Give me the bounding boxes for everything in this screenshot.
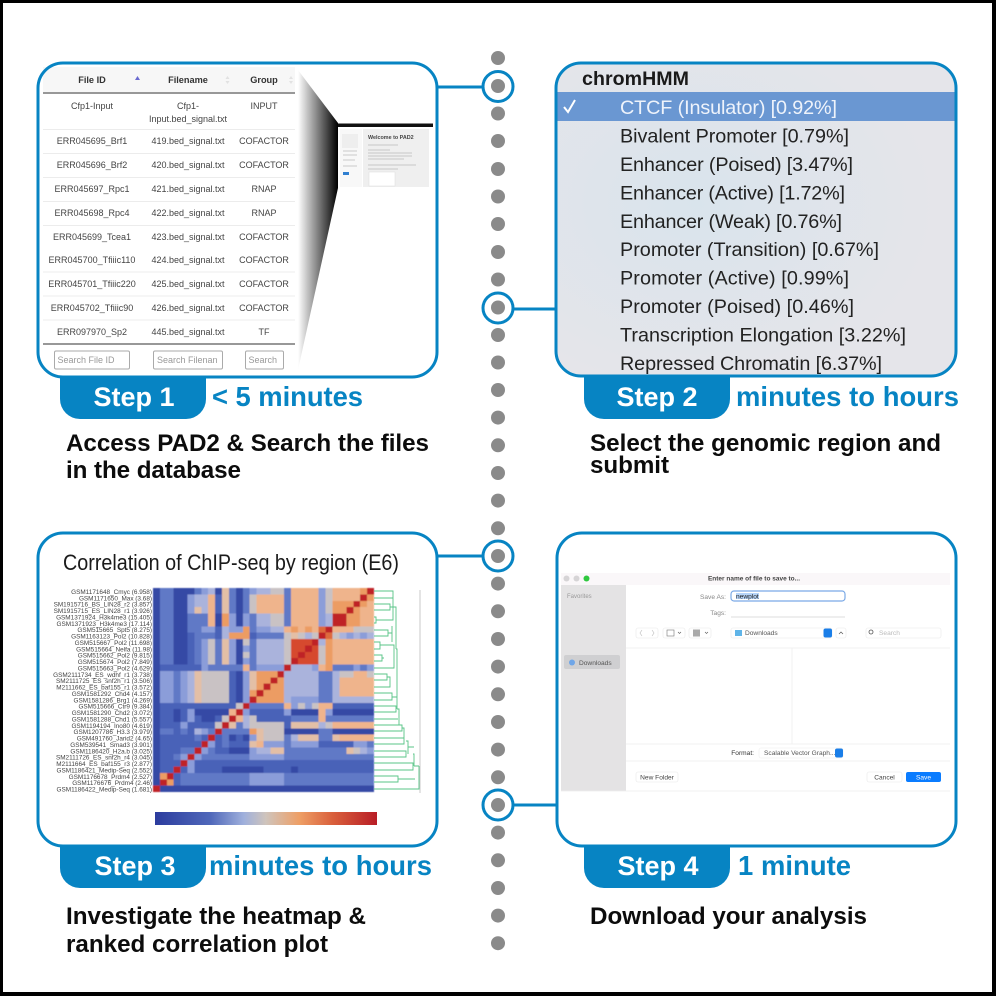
step 2 description: submit xyxy=(590,452,669,479)
step 2 tab: Step 2 xyxy=(616,382,698,412)
table of files: ERR045696_Brf2 xyxy=(57,160,127,170)
menu items: Transcription Elongation [3.22%] xyxy=(620,325,906,347)
step 2 tab xyxy=(584,376,730,419)
row labels: GSM1581286_Brg1 (4.269) xyxy=(73,697,152,704)
row labels: GSM1176678_Prdm4 (2.527) xyxy=(69,774,152,781)
menu items: Enhancer (Weak) [0.76%] xyxy=(620,211,842,233)
step 1 tab xyxy=(60,376,206,419)
table of files: Cfp1- xyxy=(177,101,199,111)
row labels: GSM1171648_Cmyc (6.958) xyxy=(71,589,152,596)
step 2 time: minutes to hours xyxy=(736,381,959,412)
row labels: SM1915716_BS_LIN28_r2 (3.857) xyxy=(54,602,152,609)
step 1 description: Access PAD2 & Search the files xyxy=(66,430,429,457)
step 4 tab: Step 4 xyxy=(617,851,699,881)
table of files: 424.bed_signal.txt xyxy=(151,255,225,265)
heatmap title: Correlation of ChIP-seq by region (E6) xyxy=(63,550,399,575)
row labels: GSM491760_Jarid2 (4.65) xyxy=(77,736,152,743)
row labels: GSM1371924_H3k4me3 (15.405) xyxy=(56,614,152,622)
table of files: ERR045698_Rpc4 xyxy=(54,208,130,218)
dialog buttons: Cancel xyxy=(874,774,895,781)
connector: step 3 to timeline xyxy=(438,541,513,571)
format selector: Scalable Vector Graph... xyxy=(764,750,836,757)
row labels: GSM1581292_Chd4 (4.157) xyxy=(72,691,152,698)
menu items: Promoter (Transition) [0.67%] xyxy=(620,239,879,261)
format selector xyxy=(731,748,843,758)
row labels: M2111664_ES_baf155_r3 (2.877) xyxy=(56,761,152,768)
table of files: 419.bed_signal.txt xyxy=(151,136,225,146)
table of files: INPUT xyxy=(250,101,278,111)
file browser dividers xyxy=(561,648,950,791)
table of files: 425.bed_signal.txt xyxy=(151,279,225,289)
menu items: Enhancer (Poised) [3.47%] xyxy=(620,154,853,176)
row labels: GSM515662_Pol2 (9.815) xyxy=(78,653,152,660)
table of files: 423.bed_signal.txt xyxy=(151,232,225,242)
dialog sidebar: Favorites xyxy=(567,594,592,600)
thumbnail: PAD2 welcome page xyxy=(338,124,433,187)
table of files: COFACTOR xyxy=(239,255,289,265)
save-as fields: newplot xyxy=(736,594,759,600)
menu items: Promoter (Active) [0.99%] xyxy=(620,268,849,290)
table of files: COFACTOR xyxy=(239,303,289,313)
dialog buttons xyxy=(636,772,941,782)
row labels: GSM2111734_ES_wdhf_r1 (3.738) xyxy=(53,672,152,679)
table of files: COFACTOR xyxy=(239,160,289,170)
save-as fields: Tags: xyxy=(710,610,726,617)
step 2 description: Select the genomic region and xyxy=(590,430,941,457)
table of files: ERR045699_Tcea1 xyxy=(53,232,131,242)
table of files: COFACTOR xyxy=(239,232,289,242)
step 4 tab xyxy=(584,846,730,888)
row labels: GSM1186422_Medip-Seq (1.681) xyxy=(57,787,152,794)
table of files: 421.bed_signal.txt xyxy=(151,184,225,194)
panel: step 2 chromHMM menu xyxy=(556,63,956,376)
zoom funnel from thumbnail xyxy=(298,70,338,370)
correlation heatmap grid xyxy=(153,588,374,792)
panel 1 border xyxy=(38,63,437,377)
step 3 description: Investigate the heatmap & xyxy=(66,903,366,930)
step 4 time: 1 minute xyxy=(738,850,851,881)
table of files: COFACTOR xyxy=(239,136,289,146)
row labels: GSM1581288_Chd1 (5.557) xyxy=(72,716,152,724)
dialog title bar: Enter name of file to save to... xyxy=(708,576,800,582)
table of files: ERR045702_Tfiiic90 xyxy=(51,303,133,313)
step 3 description: ranked correlation plot xyxy=(66,931,328,958)
row labels: GSM1207786_H3.3 (3.979) xyxy=(73,729,152,736)
table of files: 420.bed_signal.txt xyxy=(151,160,225,170)
panel 2 border xyxy=(556,63,956,376)
search inputs: Search File ID xyxy=(58,355,115,365)
search inputs: Search Filenan xyxy=(157,355,218,365)
dialog toolbar: Search xyxy=(879,630,900,637)
connector: step 1 to timeline xyxy=(438,72,513,102)
colour scale bar xyxy=(155,812,377,825)
save-as fields: Save As: xyxy=(700,594,726,601)
dialog toolbar xyxy=(636,628,941,638)
menu items: Bivalent Promoter [0.79%] xyxy=(620,126,849,148)
table of files: Input.bed_signal.txt xyxy=(149,114,228,124)
thumbnail: PAD2 welcome page: Welcome to PAD2 xyxy=(368,135,414,141)
table of files: Cfp1-Input xyxy=(71,101,114,111)
row labels: GSM1186420_H2a.b (3.025) xyxy=(70,748,152,755)
table of files: ERR045701_Tfiiic220 xyxy=(48,279,136,289)
connector: step 4 to timeline xyxy=(483,790,556,820)
dialog buttons: Save xyxy=(916,774,931,781)
selected row highlight xyxy=(556,92,956,121)
table header band xyxy=(43,67,295,92)
table of files: ERR045700_Tfiiic110 xyxy=(49,255,135,265)
table of files: COFACTOR xyxy=(239,279,289,289)
panel: step 3 heatmap xyxy=(38,533,437,846)
row labels: GSM1581290_Chd2 (3.072) xyxy=(72,710,152,717)
connector: step 2 to timeline xyxy=(483,293,556,323)
row labels: GSM539541_Smad3 (3.901) xyxy=(70,742,152,749)
menu items: Promoter (Poised) [0.46%] xyxy=(620,296,854,318)
menu items: Repressed Chromatin [6.37%] xyxy=(620,353,882,375)
step 4 description: Download your analysis xyxy=(590,903,867,930)
row labels: GSM515665_Spt5 (8.275) xyxy=(77,627,152,634)
row labels xyxy=(53,589,152,794)
row labels: GSM515663_Pol2 (4.629) xyxy=(78,666,152,672)
panel: step 4 save dialog xyxy=(557,533,956,846)
dialog sidebar xyxy=(561,585,626,791)
step 3 tab: Step 3 xyxy=(94,851,176,881)
panel: step 1 file table xyxy=(38,63,437,377)
table of files: 445.bed_signal.txt xyxy=(151,327,225,337)
row labels: GSM1371923_H3k4me3 (17.114) xyxy=(57,621,152,628)
table of files: Group xyxy=(250,75,278,85)
step 1 description: in the database xyxy=(66,457,241,484)
menu items: CTCF (Insulator) [0.92%] xyxy=(620,97,837,119)
checkmark xyxy=(564,100,575,112)
table of files: RNAP xyxy=(251,208,277,218)
row labels: GSM1163123_Pol2 (10.828) xyxy=(71,634,152,641)
table of files: File ID xyxy=(78,75,106,85)
row labels: GSM1176676_Prdm4 (2.46) xyxy=(72,780,152,787)
row labels: GSM515664_Nelfa (11.98) xyxy=(76,646,152,653)
dialog toolbar: Downloads xyxy=(745,630,778,637)
format selector: Format: xyxy=(731,750,754,757)
dialog title bar xyxy=(561,573,950,585)
row labels: GSM1186421_Medip-Seq (2.552) xyxy=(57,768,152,774)
row labels: M2111662_ES_baf155_r1 (3.572) xyxy=(56,685,152,692)
table of files: ERR097970_Sp2 xyxy=(57,327,127,337)
search inputs: Search xyxy=(248,355,277,365)
dialog sidebar: Downloads xyxy=(579,660,612,667)
row labels: SM2111726_ES_snf2h_r4 (3.045) xyxy=(56,755,152,762)
table of files: ERR045697_Rpc1 xyxy=(54,184,130,194)
menu items: Enhancer (Active) [1.72%] xyxy=(620,182,845,204)
dendrogram axis xyxy=(419,590,421,793)
table of files: 426.bed_signal.txt xyxy=(151,303,225,313)
row labels: GSM515667_Pol2 (11.698) xyxy=(75,640,152,647)
step 3 time: minutes to hours xyxy=(209,850,432,881)
table of files: ERR045695_Brf1 xyxy=(57,136,127,146)
step 1 tab: Step 1 xyxy=(93,382,175,412)
row labels: SM1915715_ES_LIN28_r1 (3.926) xyxy=(54,608,152,615)
row labels: GSM515674_Pol2 (7.849) xyxy=(78,659,152,666)
step 3 tab xyxy=(60,846,206,888)
table of files xyxy=(43,75,295,344)
search inputs xyxy=(54,351,284,369)
row labels: SM2111725_ES_snf2h_r1 (3.506) xyxy=(56,678,152,685)
menu items xyxy=(620,97,906,375)
dotted vertical timeline xyxy=(491,51,505,950)
table of files: Filename xyxy=(168,75,208,85)
row labels: GSM515666_Ctr9 (9.384) xyxy=(78,704,152,711)
dialog buttons: New Folder xyxy=(640,774,675,781)
row labels: GSM1171650_Max (3.68) xyxy=(79,595,152,602)
table of files: TF xyxy=(258,327,270,337)
table of files: RNAP xyxy=(251,184,277,194)
menu heading: chromHMM xyxy=(582,68,689,90)
dendrogram xyxy=(374,591,419,789)
step 1 time: < 5 minutes xyxy=(212,381,363,412)
row labels: GSM1194194_Ino80 (4.619) xyxy=(71,723,152,730)
table of files: 422.bed_signal.txt xyxy=(151,208,225,218)
save-as fields xyxy=(700,591,845,617)
